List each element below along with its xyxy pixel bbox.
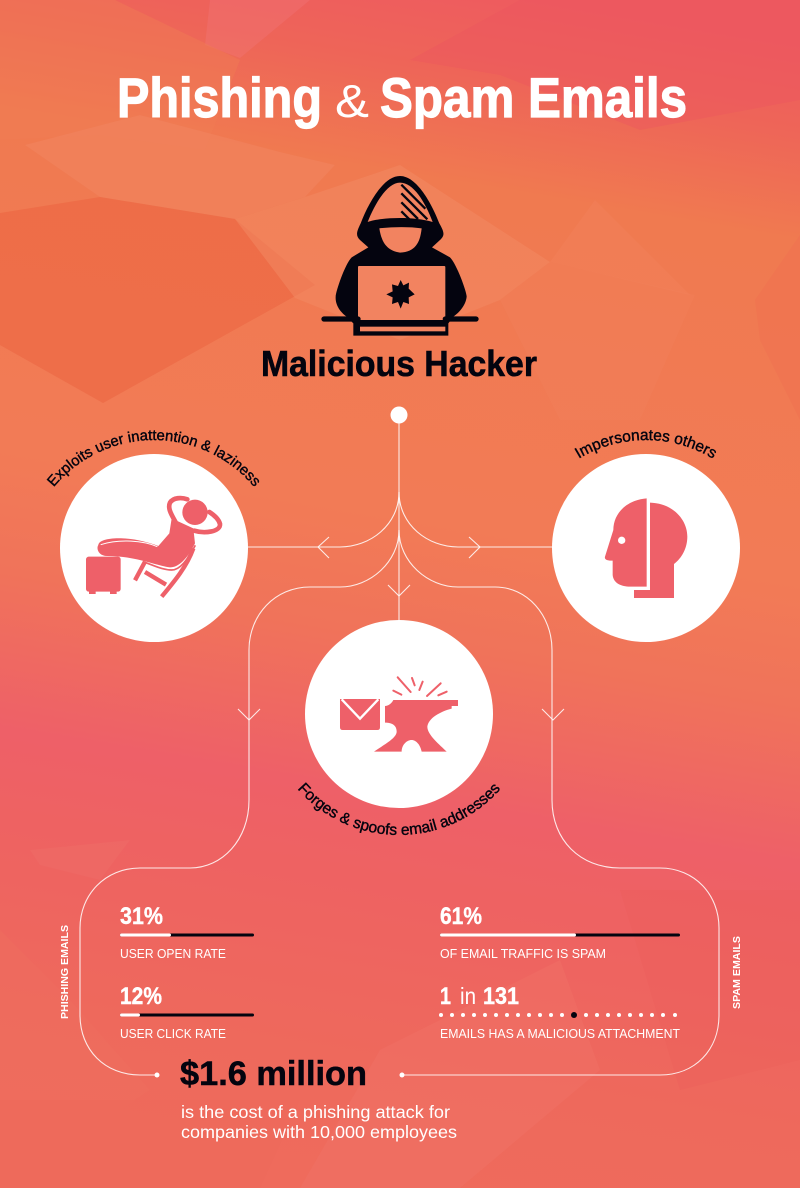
dot row	[439, 1012, 677, 1018]
icon: hacker	[324, 176, 476, 336]
callout: cost of phishing: $1.6 million	[180, 1055, 367, 1093]
icon: envelope on anvil	[340, 677, 458, 752]
stat: malicious attachment	[439, 983, 680, 1041]
heading: Malicious Hacker: Malicious Hacker	[261, 343, 537, 384]
stat: user click rate	[120, 983, 254, 1041]
title: &	[335, 75, 369, 127]
stat: malicious attachment: in	[460, 983, 476, 1009]
start node	[390, 406, 408, 424]
side label: spam emails: SPAM EMAILS	[731, 936, 743, 1009]
stat: malicious attachment: 1	[440, 983, 451, 1010]
end node left	[154, 1072, 160, 1078]
label: laziness: Exploits user inattention & laziness	[46, 430, 260, 487]
callout: cost of phishing	[180, 1055, 457, 1142]
label: impersonation: Impersonates others	[574, 430, 716, 458]
stat: user click rate: USER CLICK RATE	[120, 1027, 226, 1041]
icon: split head	[605, 498, 687, 598]
stat: user open rate: USER OPEN RATE	[120, 947, 226, 961]
label: forging: Forges & spoofs email addresses	[298, 782, 500, 836]
callout: cost of phishing: is the cost of a phishing attack for	[181, 1102, 450, 1122]
stat: spam traffic: OF EMAIL TRAFFIC IS SPAM	[440, 947, 606, 961]
title: Phishing	[117, 66, 322, 129]
callout: cost of phishing: companies with 10,000 employees	[181, 1122, 457, 1142]
stat: user open rate: 31%	[120, 903, 163, 930]
panel: laziness	[60, 454, 248, 642]
stat: malicious attachment: EMAILS HAS A MALICIOUS ATTACHMENT	[440, 1027, 680, 1041]
stat: spam traffic: 61%	[440, 903, 482, 930]
stat: spam traffic	[440, 903, 680, 961]
side label: phishing emails: PHISHING EMAILS	[59, 925, 71, 1019]
title: Spam Emails	[380, 66, 687, 129]
title	[117, 66, 687, 129]
end node right	[400, 1072, 404, 1078]
stat: malicious attachment: 131	[483, 983, 519, 1010]
stat: user open rate	[120, 903, 254, 961]
icon: reclining person	[86, 498, 220, 597]
stat: user click rate: 12%	[120, 983, 162, 1010]
panel: impersonation	[552, 454, 740, 642]
panel: forging	[305, 620, 493, 808]
flow lines	[80, 415, 719, 1075]
